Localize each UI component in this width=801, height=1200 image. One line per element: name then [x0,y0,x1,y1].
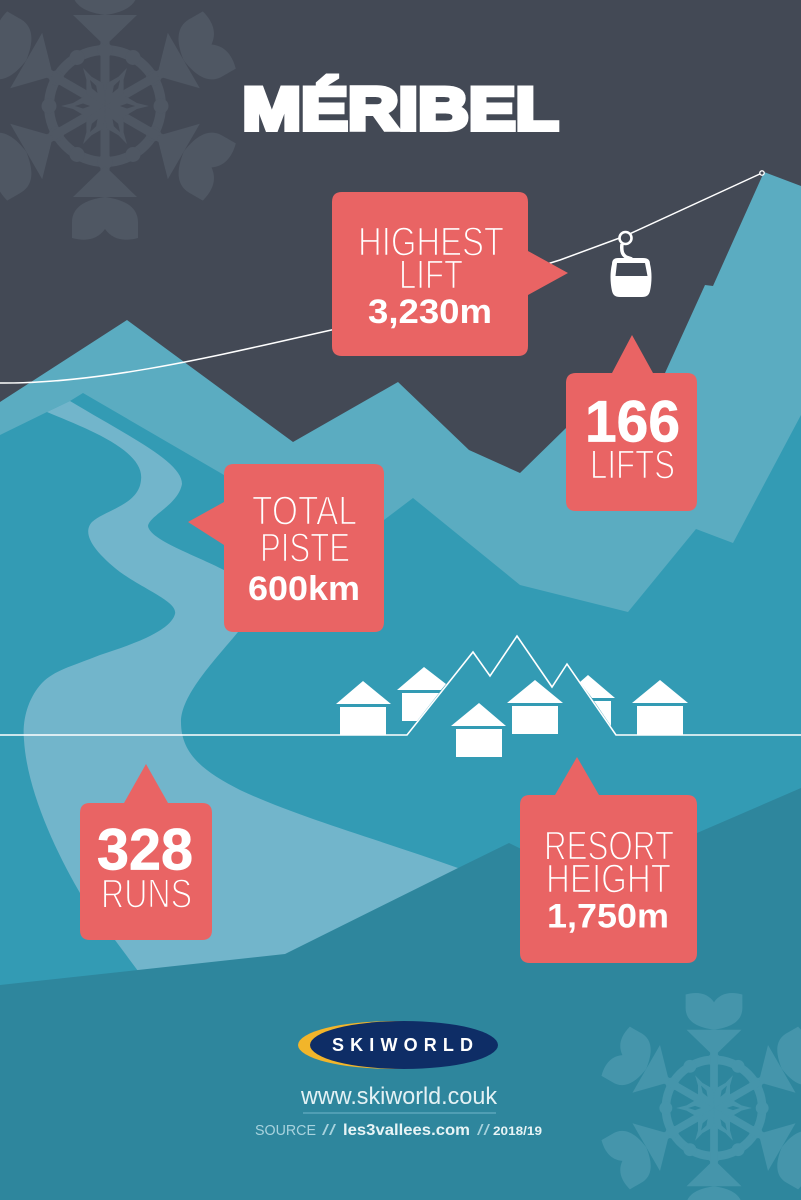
house 2 [397,667,446,721]
foreground slope [0,788,801,1200]
callout: lifts [566,335,697,511]
mid mountains [0,393,801,1000]
icon: gondola [610,232,652,297]
house 5 [580,675,615,726]
village [0,636,801,757]
callout: lifts: 166 [585,390,680,454]
callout: resort height: HEIGHT [546,856,671,902]
website url: www.skiworld.couk [300,1083,498,1110]
callout: lifts: LIFTS [590,442,675,488]
callout: highest lift: 3,230m [368,293,492,331]
callout: resort height [520,757,697,963]
logo: Skiworld [298,1021,498,1069]
house 4 [507,680,563,734]
source line [255,1122,542,1139]
callout: total piste: 600km [248,570,360,608]
callout: runs: RUNS [101,870,192,916]
source line: SOURCE [255,1122,316,1139]
house 6 [632,680,688,735]
callout: highest lift [332,192,568,356]
callout: runs [80,764,212,940]
far mountains [0,172,801,640]
source line: les3vallees.com [343,1122,470,1139]
icon: snowflake top left [0,0,237,240]
callout: resort height: 1,750m [547,898,669,936]
title: MÉRIBEL [242,76,558,142]
skyline line [0,636,801,735]
source line: 2018/19 [493,1124,542,1138]
callout: highest lift: HIGHEST [358,218,504,264]
callout: total piste [188,464,384,632]
callout: total piste: TOTAL [252,488,357,534]
callout: resort height: RESORT [544,822,674,868]
house 1 [336,681,391,735]
logo: Skiworld: SKIWORLD [332,1035,473,1055]
source line: // [477,1122,491,1139]
ski piste [24,401,470,971]
house 3 [451,703,506,757]
callout: highest lift: LIFT [399,252,463,298]
callout: runs: 328 [97,818,193,882]
cable car line [0,171,764,383]
source line: // [322,1122,337,1139]
icon: snowflake bottom right [600,993,801,1200]
callout: total piste: PISTE [260,524,350,570]
